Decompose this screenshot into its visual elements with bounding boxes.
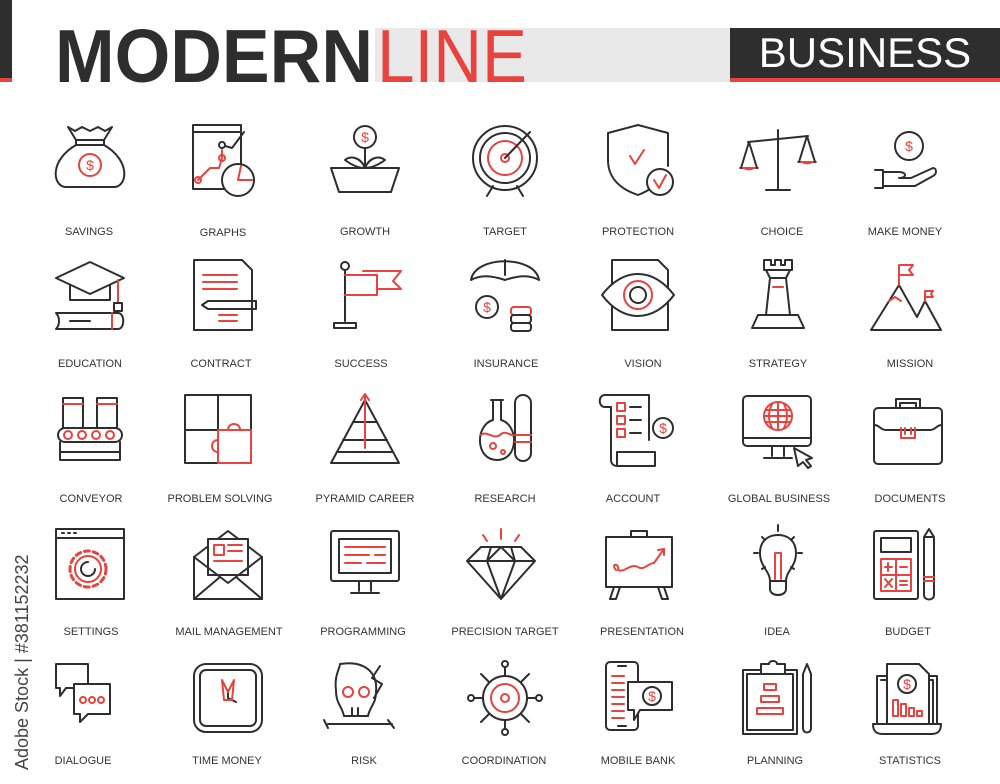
- labels: MISSION: [887, 358, 933, 370]
- icon: dialogue: [56, 664, 110, 722]
- labels: PROBLEM SOLVING: [168, 493, 272, 505]
- icon: risk: [324, 663, 394, 728]
- header gray band: [375, 28, 730, 82]
- labels: PROGRAMMING: [320, 626, 406, 638]
- labels: VISION: [624, 358, 662, 370]
- labels: INSURANCE: [474, 358, 538, 370]
- labels: IDEA: [764, 626, 790, 638]
- icon: education: [56, 262, 124, 329]
- icon: savings: $: [86, 157, 94, 173]
- icon: documents: [874, 399, 942, 464]
- labels: GRAPHS: [200, 227, 246, 239]
- icon: precision target: [467, 529, 535, 599]
- icon: insurance: [471, 260, 539, 331]
- labels: MAKE MONEY: [868, 226, 943, 238]
- labels: TIME MONEY: [192, 755, 262, 767]
- icon: budget: [874, 529, 934, 600]
- labels: COORDINATION: [462, 755, 546, 767]
- icon: mobile bank: [606, 662, 672, 730]
- labels: RESEARCH: [474, 493, 536, 505]
- header business box: [730, 28, 1000, 82]
- labels: ACCOUNT: [606, 493, 660, 505]
- labels: GLOBAL BUSINESS: [728, 493, 830, 505]
- labels: GROWTH: [340, 226, 390, 238]
- icon: global business: [743, 396, 812, 468]
- icon: mission: [871, 265, 941, 330]
- icon: strategy: [752, 260, 804, 328]
- labels: SUCCESS: [334, 358, 388, 370]
- labels: STATISTICS: [879, 755, 941, 767]
- icon: growth: $: [361, 129, 369, 145]
- header business box: BUSINESS: [759, 29, 971, 76]
- icon: account: [600, 395, 673, 466]
- labels: DOCUMENTS: [875, 493, 945, 505]
- icon: choice: [740, 130, 816, 190]
- labels: [55, 226, 945, 767]
- labels: PROTECTION: [602, 226, 674, 238]
- labels: MOBILE BANK: [601, 755, 676, 767]
- icon: conveyor: [58, 398, 122, 460]
- icon: make money: $: [905, 138, 913, 154]
- icon: problem solving: [185, 395, 251, 463]
- icon: mail management: [194, 531, 262, 599]
- labels: MAIL MANAGEMENT: [175, 626, 283, 638]
- labels: SETTINGS: [63, 626, 119, 638]
- labels: PYRAMID CAREER: [315, 493, 415, 505]
- labels: DIALOGUE: [55, 755, 111, 767]
- icon: research: [480, 395, 531, 461]
- header left bar: [0, 0, 12, 82]
- icon: insurance: $: [483, 299, 491, 315]
- icon: time money: [194, 664, 262, 732]
- icon: savings: [56, 127, 124, 187]
- icon: target: [473, 126, 537, 196]
- labels: PLANNING: [747, 755, 803, 767]
- labels: CONTRACT: [190, 358, 252, 370]
- icon: pyramid career: [331, 394, 399, 463]
- icon: statistics: $: [903, 676, 911, 692]
- icon: success: [334, 262, 401, 328]
- labels: TARGET: [483, 226, 527, 238]
- icon: settings: [56, 529, 124, 599]
- labels: BUDGET: [885, 626, 931, 638]
- labels: STRATEGY: [749, 358, 808, 370]
- icon: statistics: [873, 664, 941, 734]
- icon: graphs: [193, 125, 254, 196]
- icon: growth: [331, 126, 399, 192]
- labels: PRECISION TARGET: [451, 626, 559, 638]
- icon: mobile bank: $: [648, 688, 656, 704]
- labels: EDUCATION: [58, 358, 122, 370]
- icon: account: $: [659, 420, 667, 436]
- labels: SAVINGS: [65, 226, 113, 238]
- icon: protection: [608, 125, 673, 195]
- icon: coordination: [468, 661, 542, 735]
- icon: programming: [331, 531, 399, 593]
- labels: CHOICE: [761, 226, 803, 238]
- icon: idea: [754, 525, 802, 595]
- labels: PRESENTATION: [600, 626, 684, 638]
- labels: RISK: [351, 755, 377, 767]
- icon: presentation: [606, 531, 672, 599]
- stock id vertical: Adobe Stock | #381152232: [12, 554, 32, 770]
- labels: CONVEYOR: [60, 493, 123, 505]
- icon: contract: [194, 260, 256, 330]
- icon: vision: [602, 260, 674, 330]
- icon: make money: [875, 132, 936, 188]
- icon: planning: [743, 661, 811, 734]
